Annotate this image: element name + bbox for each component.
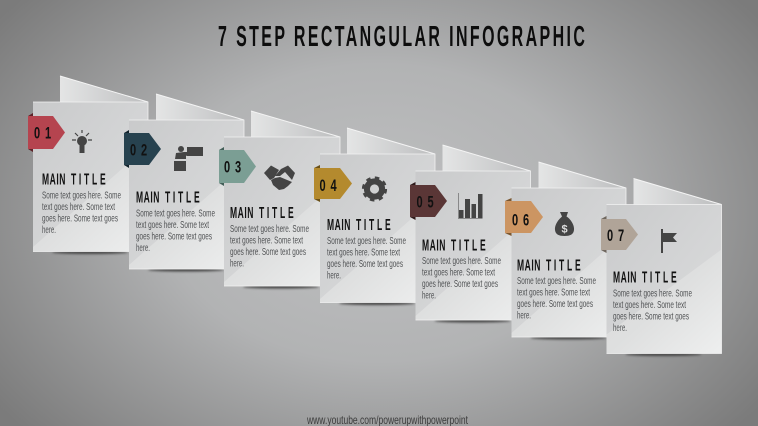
step 4 card xyxy=(314,128,435,305)
body text 7: text goes here. Some text xyxy=(613,299,686,311)
body text 4 xyxy=(327,235,406,282)
body text 5: here. xyxy=(422,290,436,302)
main title 3: TITLE xyxy=(259,204,296,222)
main title 2: MAIN xyxy=(136,189,160,206)
number tag 05: 05 xyxy=(416,193,439,212)
body text 5: goes here. Some text goes xyxy=(422,278,498,290)
number tag 07: 07 xyxy=(607,227,629,246)
title: 7 STEP RECTANGULAR INFOGRAPHIC xyxy=(218,20,585,52)
body text 1 xyxy=(42,189,121,236)
icon: flag xyxy=(661,229,677,253)
card paper 3 xyxy=(224,111,340,289)
step 1 card xyxy=(28,76,148,254)
icon: money bag xyxy=(555,212,574,236)
number tag 05 xyxy=(410,182,447,220)
number tag 06 xyxy=(505,198,543,236)
number tag 02: 02 xyxy=(130,141,152,160)
main title 2: TITLE xyxy=(165,189,202,206)
body text 6: Some text goes here. Some xyxy=(517,275,596,287)
body text 5 xyxy=(422,255,501,302)
icon: presenter at board xyxy=(174,146,203,171)
number tag 04 xyxy=(314,165,352,202)
number tag 07 xyxy=(601,216,638,253)
body text 4: goes here. Some text goes xyxy=(327,258,403,270)
step 2 card xyxy=(124,94,244,272)
icon: light bulb xyxy=(72,130,92,153)
icon: handshake xyxy=(264,166,295,190)
body text 6: here. xyxy=(517,310,531,322)
number tag 06: 06 xyxy=(512,211,534,230)
card paper 7 xyxy=(606,178,722,356)
number tag 04: 04 xyxy=(320,177,342,196)
body text 4: text goes here. Some text xyxy=(327,246,400,258)
main title 1: MAIN xyxy=(42,171,66,188)
body text 4: Some text goes here. Some xyxy=(327,235,406,247)
main title 7: MAIN xyxy=(613,269,637,286)
body text 2: Some text goes here. Some xyxy=(136,208,215,220)
main title 6: MAIN xyxy=(517,257,541,274)
body text 5: text goes here. Some text xyxy=(422,266,495,278)
icon: gear xyxy=(364,178,385,200)
body text 2: text goes here. Some text xyxy=(136,219,209,231)
number tag 01 xyxy=(28,113,65,152)
number tag 01: 01 xyxy=(34,124,56,143)
body text 2: here. xyxy=(136,242,150,254)
step 5 card xyxy=(410,145,530,323)
main title 3: MAIN xyxy=(230,204,254,222)
body text 7: goes here. Some text goes xyxy=(613,311,689,323)
body text 1: text goes here. Some text xyxy=(42,201,115,213)
body text 3: goes here. Some text goes xyxy=(230,246,306,258)
body text 1: goes here. Some text goes xyxy=(42,212,118,224)
body text 2: goes here. Some text goes xyxy=(136,231,212,243)
number tag 03: 03 xyxy=(224,158,246,177)
card paper 2 xyxy=(129,94,244,272)
main title 5: MAIN xyxy=(422,237,446,254)
step 6 card xyxy=(505,162,626,340)
main title 1: TITLE xyxy=(71,171,108,188)
icon: bar chart xyxy=(458,193,482,219)
body text 6: text goes here. Some text xyxy=(517,286,590,298)
number tag 02 xyxy=(124,130,161,168)
body text 3: here. xyxy=(230,258,244,270)
card paper 4 xyxy=(320,128,435,305)
body text 7 xyxy=(613,288,692,334)
card paper 6 xyxy=(512,162,626,340)
main title 4: MAIN xyxy=(327,216,351,234)
card paper 1 xyxy=(33,76,148,254)
main title 4: TITLE xyxy=(356,216,393,234)
step 7 card xyxy=(601,178,722,356)
main title 5: TITLE xyxy=(451,237,488,254)
main title 7: TITLE xyxy=(642,269,679,286)
body text 2 xyxy=(136,208,215,254)
step 3 card xyxy=(219,111,340,289)
body text 3: Some text goes here. Some xyxy=(230,223,309,235)
body text 1: here. xyxy=(42,224,56,236)
body text 6 xyxy=(517,275,596,322)
body text 4: here. xyxy=(327,270,341,282)
body text 5: Some text goes here. Some xyxy=(422,255,501,267)
body text 6: goes here. Some text goes xyxy=(517,298,593,310)
body text 7: here. xyxy=(613,322,627,334)
icon: money bag: $ xyxy=(561,224,568,236)
body text 7: Some text goes here. Some xyxy=(613,288,692,300)
main title 6: TITLE xyxy=(546,257,583,274)
number tag 03 xyxy=(219,147,256,186)
body text 1: Some text goes here. Some xyxy=(42,189,121,201)
card paper 5 xyxy=(416,145,530,323)
body text 3 xyxy=(230,223,309,270)
body text 3: text goes here. Some text xyxy=(230,234,303,246)
